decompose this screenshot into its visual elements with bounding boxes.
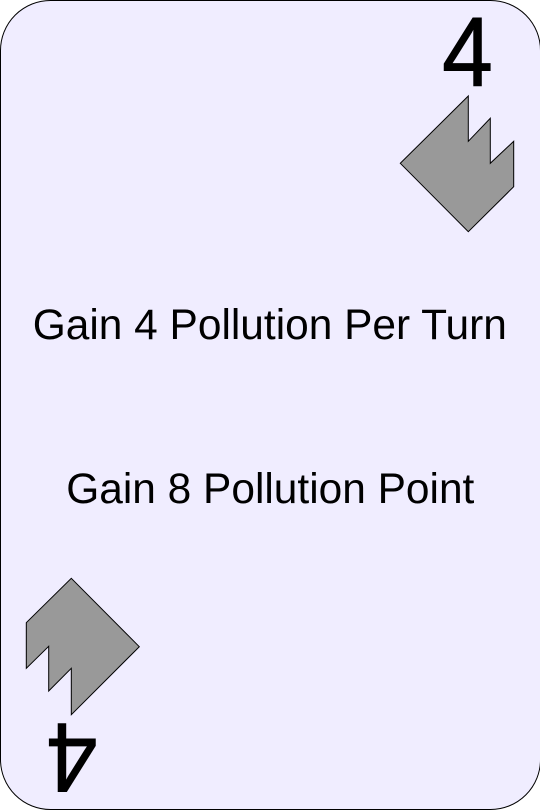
effect text: pollution point: Gain 8 Pollution Point xyxy=(66,465,475,512)
icon: bottom left pollution factory xyxy=(26,578,139,715)
top right value: 4: 4 xyxy=(442,0,493,108)
icon: top right pollution factory xyxy=(400,96,514,232)
bottom left inverted value: 4: 4 xyxy=(47,702,97,810)
effect text: pollution per turn: Gain 4 Pollution Per Turn xyxy=(33,301,507,348)
